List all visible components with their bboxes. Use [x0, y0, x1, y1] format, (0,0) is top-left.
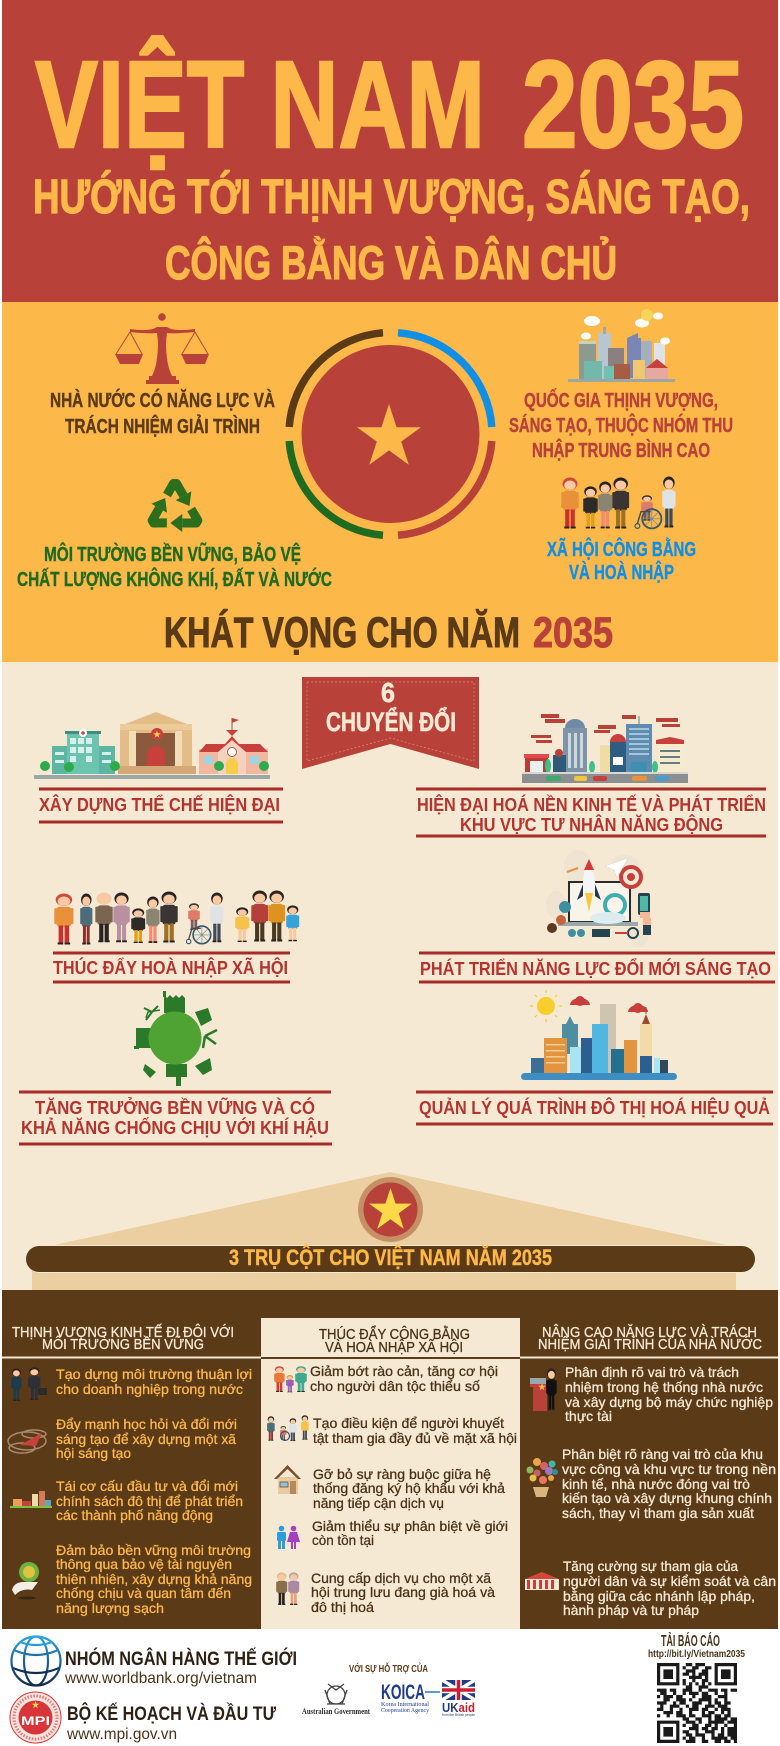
- text: environmental sustainability: thông qua bảo vệ tài nguyên: [56, 1556, 232, 1572]
- illustration: government buildings: [34, 712, 270, 779]
- icon: inclusive people: [561, 476, 676, 528]
- logo: KOICA: KOICA: [381, 1681, 425, 1704]
- text: learning and innovation: sáng tạo để xây dựng một xã: [56, 1431, 236, 1447]
- QR code: [657, 1663, 737, 1743]
- text: ethnic minorities: cho người dân tộc thiểu số: [310, 1378, 480, 1394]
- text: Ministry: BỘ KẾ HOẠCH VÀ ĐẦU TƯ: [67, 1703, 276, 1725]
- text: Ministry: [66, 1703, 276, 1743]
- text: public and private sector: vực công và khu vực tư trong nền: [562, 1461, 776, 1477]
- text: learning and innovation: [56, 1416, 237, 1461]
- text: environmental sustainability: [56, 1542, 252, 1616]
- banner: three pillars: [26, 1245, 756, 1273]
- text: learning and innovation: hội sáng tạo: [56, 1445, 131, 1461]
- illustration: urban skyline: [521, 990, 677, 1080]
- text: equitable society: VÀ HOÀ NHẬP: [569, 560, 674, 584]
- text: prosperous nation: NHẬP TRUNG BÌNH CAO: [532, 438, 710, 462]
- text: urban investment: các thành phố năng động: [56, 1507, 213, 1523]
- text: gender discrimination: Giảm thiểu sự phân biệt về giới: [312, 1518, 508, 1534]
- icon: recycle: [145, 484, 201, 536]
- text: public and private sector: Phân biệt rõ ràng vai trò của khu: [562, 1446, 763, 1462]
- logo: KOICA: Cooperation Agency: [381, 1708, 429, 1714]
- icon: city: [568, 309, 675, 382]
- text: roles and responsibilities: và xây dựng bộ máy chức nghiệp: [565, 1394, 773, 1410]
- icon: speaker at podium: [530, 1368, 557, 1411]
- logo: Ministry of Planning and Investment: [10, 1692, 61, 1743]
- text: business environment: [56, 1366, 252, 1397]
- subtitle line 2: CÔNG BẰNG VÀ DÂN CHỦ: [165, 236, 617, 289]
- text: ageing society services: Cung cấp dịch vụ cho một xã: [311, 1570, 491, 1586]
- icon: hand with plant: [12, 1562, 39, 1600]
- text: environmental sustainability: chống chịu và quan tâm đến: [56, 1585, 231, 1601]
- logo: KOICA: Korea International: [381, 1702, 429, 1708]
- text: Ministry: www.mpi.gov.vn: [66, 1726, 177, 1743]
- text: checks and balances: [563, 1558, 776, 1618]
- heading: sustainable growth: TĂNG TRƯỞNG BỀN VỮNG VÀ CÓ: [35, 1097, 315, 1118]
- text: environmental sustainability: Đảm bảo bền vững môi trường: [56, 1542, 251, 1558]
- icon: small town: [10, 1491, 52, 1508]
- heading: sustainable growth: KHẢ NĂNG CHỐNG CHỊU VỚI KHÍ HẬU: [21, 1117, 329, 1138]
- icon: learning doodle: [8, 1430, 46, 1453]
- heading: modernise the economy: KHU VỰC TƯ NHÂN NĂNG ĐỘNG: [460, 814, 723, 835]
- text: equitable society: [547, 537, 696, 584]
- text: roles and responsibilities: thực tài: [565, 1408, 612, 1424]
- illustration: social inclusion people: [54, 890, 299, 944]
- heading: social inclusion: [53, 952, 290, 984]
- heading: innovation capacity: [419, 952, 775, 984]
- text: prosperous nation: [509, 388, 733, 462]
- text: World Bank: NHÓM NGÂN HÀNG THẾ GIỚI: [65, 1648, 297, 1670]
- text: household registration: Gỡ bỏ sự ràng buộc giữa hệ: [313, 1466, 491, 1482]
- icon: ethnic minorities: [274, 1366, 307, 1392]
- heading: modern institutions: [39, 788, 283, 824]
- text: urban investment: chính sách đô thị để phát triển: [56, 1493, 243, 1509]
- text: download report: http://bit.ly/Vietnam2035: [648, 1648, 745, 1660]
- roof of the pillars temple: [2, 1172, 778, 1290]
- text: sustainable environment: CHẤT LƯỢNG KHÔNG KHÍ, ĐẤT VÀ NƯỚC: [17, 567, 332, 591]
- text: equitable society: XÃ HỘI CÔNG BẰNG: [547, 537, 696, 561]
- logo: World Bank globe: [12, 1636, 60, 1686]
- text: sustainable environment: [17, 542, 332, 591]
- icon: house: [274, 1465, 301, 1494]
- logo: UK aid: UKaid: [442, 1700, 475, 1715]
- logo: Australian Government: Australian Government: [302, 1706, 370, 1716]
- text: public and private sector: sách, thay vì tham gia sản xuất: [562, 1505, 754, 1521]
- text: roles and responsibilities: [565, 1364, 773, 1424]
- text: World Bank: www.worldbank.org/vietnam: [64, 1670, 257, 1687]
- text: business environment: Tạo dựng môi trường thuận lợi: [56, 1366, 252, 1382]
- ribbon: 6 transformations: 6: [381, 677, 395, 708]
- icon: man and woman: [277, 1526, 300, 1549]
- logo: Australian Government: [302, 1684, 370, 1716]
- text: download report: TẢI BÁO CÁO: [661, 1631, 720, 1650]
- text: ethnic minorities: Giảm bớt rào cản, tăng cơ hội: [310, 1363, 498, 1379]
- text: household registration: thống đăng ký hộ khẩu với khả: [313, 1480, 505, 1496]
- icon: balloons and basket: [526, 1458, 558, 1497]
- text: public and private sector: [562, 1446, 776, 1521]
- text: urban investment: [56, 1478, 243, 1523]
- text: environmental sustainability: năng lượng sạch: [56, 1600, 164, 1616]
- text: ageing society services: hội trung lưu đang già hoá và: [311, 1584, 495, 1600]
- icon: handshake: [11, 1367, 47, 1401]
- text: prosperous nation: QUỐC GIA THỊNH VƯỢNG,: [524, 388, 718, 412]
- column 1 header: MÔI TRƯỜNG BỀN VỮNG: [42, 1336, 204, 1353]
- column 3 header: NHIỆM GIẢI TRÌNH CỦA NHÀ NƯỚC: [538, 1335, 762, 1353]
- panel: six transformations: [2, 662, 778, 1290]
- text: public and private sector: kiến tạo và xây dựng khung chính: [562, 1490, 772, 1506]
- text: public and private sector: kinh tế, nhà nước đóng vai trò: [562, 1476, 750, 1492]
- heading: modernise the economy: [416, 788, 766, 838]
- text: capable state: TRÁCH NHIỆM GIẢI TRÌNH: [65, 414, 260, 438]
- heading: aspirations for 2035: 2035: [533, 609, 613, 657]
- text: people with disabilities: Tạo điều kiện để người khuyết: [313, 1415, 504, 1431]
- panel: aspirations: [2, 302, 778, 662]
- emblem: star: [358, 1177, 423, 1242]
- text: roles and responsibilities: nhiệm trong hệ thống nhà nước: [565, 1379, 763, 1395]
- text: checks and balances: bằng giữa các nhánh lập pháp,: [563, 1588, 755, 1604]
- heading: sustainable growth: [19, 1090, 332, 1146]
- text: gender discrimination: còn tồn tại: [312, 1532, 374, 1548]
- heading: social inclusion: THÚC ĐẨY HOÀ NHẬP XÃ HỘI: [53, 957, 288, 978]
- text: capable state: NHÀ NƯỚC CÓ NĂNG LỰC VÀ: [50, 388, 275, 412]
- illustration: innovation rocket and laptop: [546, 850, 651, 947]
- text: urban investment: Tái cơ cấu đầu tư và đổi mới: [56, 1478, 238, 1494]
- text: download report: [648, 1631, 745, 1660]
- text: household registration: [313, 1466, 505, 1511]
- text: business environment: cho doanh nghiệp trong nước: [56, 1381, 243, 1397]
- column 1 header: [12, 1324, 234, 1353]
- text: checks and balances: người dân và sự kiểm soát và cân: [563, 1573, 776, 1589]
- column 2 header: THÚC ĐẨY CÔNG BẰNG: [319, 1325, 470, 1343]
- text: sustainable environment: MÔI TRƯỜNG BỀN VỮNG, BẢO VỆ: [44, 542, 301, 566]
- text: capable state: [50, 388, 275, 438]
- central circle with star: [289, 333, 492, 535]
- logo: KOICA: [381, 1681, 440, 1714]
- column 1 header: THỊNH VƯỢNG KINH TẾ ĐI ĐÔI VỚI: [12, 1324, 234, 1341]
- text: people with disabilities: [313, 1415, 517, 1446]
- ribbon: 6 transformations: [302, 677, 479, 769]
- text: learning and innovation: Đẩy mạnh học hỏi và đổi mới: [56, 1416, 237, 1432]
- heading: modern institutions: XÂY DỰNG THỂ CHẾ HIỆN ĐẠI: [39, 794, 280, 815]
- panel: three pillars: [2, 1290, 778, 1629]
- ribbon: 6 transformations: CHUYỂN ĐỔI: [326, 706, 456, 737]
- text: environmental sustainability: thiên nhiên, xây dựng khả năng: [56, 1571, 252, 1587]
- icon: people with disabilities: [267, 1415, 309, 1441]
- heading: urbanisation: [416, 1090, 773, 1126]
- footer: [10, 1631, 745, 1743]
- icon: scales of justice: [115, 313, 209, 384]
- text: household registration: năng tiếp cận dịch vụ: [313, 1495, 444, 1511]
- text: checks and balances: hành pháp và tư pháp: [563, 1602, 699, 1618]
- text: ageing society services: đô thị hoá: [311, 1599, 374, 1615]
- text: gender discrimination: [312, 1518, 508, 1548]
- text: checks and balances: Tăng cường sự tham gia của: [563, 1558, 738, 1574]
- column 2 header: VÀ HOÀ NHẬP XÃ HỘI: [325, 1339, 463, 1356]
- text: ageing society services: [311, 1570, 495, 1615]
- text: World Bank: [64, 1648, 297, 1687]
- column 3 header: [538, 1324, 762, 1353]
- column 2 header: [319, 1325, 470, 1356]
- icon: public building: [525, 1572, 559, 1590]
- text: ethnic minorities: [310, 1363, 498, 1394]
- logo: UK aid: [442, 1680, 475, 1717]
- illustration: green globe: [134, 991, 217, 1086]
- text: people with disabilities: tật tham gia đầy đủ về mặt xã hội: [313, 1430, 517, 1446]
- panel: title banner: [2, 0, 778, 302]
- title: VIỆT NAM: [35, 37, 485, 174]
- illustration: modern economy city: [522, 714, 688, 783]
- heading: aspirations for 2035: KHÁT VỌNG CHO NĂM: [164, 609, 520, 657]
- logo: Ministry of Planning and Investment: MPI: [21, 1714, 50, 1728]
- icon: elderly couple: [276, 1572, 299, 1605]
- logo: UK aid: from the British people: [442, 1713, 475, 1717]
- text: roles and responsibilities: Phân định rõ vai trò và trách: [565, 1364, 739, 1380]
- text: with support from: VỚI SỰ HỖ TRỢ CỦA: [349, 1662, 428, 1675]
- column 3 header: NÂNG CAO NĂNG LỰC VÀ TRÁCH: [542, 1324, 757, 1341]
- banner: three pillars: 3 TRỤ CỘT CHO VIỆT NAM NĂM 2035: [229, 1245, 552, 1270]
